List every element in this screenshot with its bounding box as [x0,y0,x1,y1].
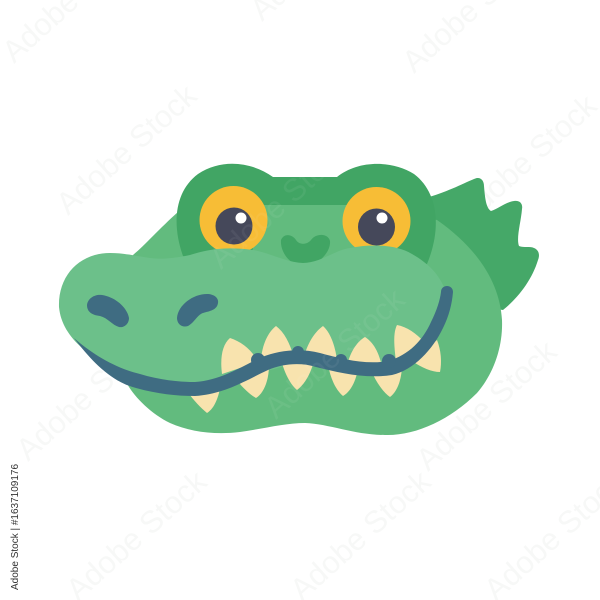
upper tooth 4 [347,337,382,367]
left eye [200,186,268,254]
eye sockets: dark green brow [177,164,436,270]
watermarks on the crocodile: Adobe Stock [202,131,357,275]
lower tooth f [187,383,221,413]
watermarks on the crocodile [202,131,412,425]
head body [117,190,502,435]
right eye [342,187,410,255]
upper tooth 5 [394,325,424,362]
lower tooth e [235,365,269,398]
mouth line [74,286,453,396]
tail spikes [425,178,539,310]
mouth bumps [251,346,396,368]
lower tooth b [371,364,402,397]
forehead between eyes [250,205,360,262]
snout [59,246,445,392]
center nose mark [281,235,330,266]
watermarks: repeated stock text: Adobe Stock [449,87,600,231]
right nostril [177,294,218,327]
lower tooth d [281,360,314,390]
watermarks on the crocodile: Adobe Stock [257,281,412,425]
upper tooth 3 [304,326,337,360]
upper tooth 1 [221,338,258,374]
watermarks: repeated stock text: Adobe Stock [9,323,164,467]
side credit text: Adobe Stock | #1637109176 [10,464,21,590]
teeth [187,325,441,413]
left nostril [87,295,129,327]
lower tooth c [328,365,358,396]
lower tooth a [412,340,441,372]
upper tooth 2 [261,326,294,360]
watermarks: repeated stock text: Adobe Stock [409,333,564,477]
watermarks: repeated stock text: Adobe Stock [49,77,204,221]
